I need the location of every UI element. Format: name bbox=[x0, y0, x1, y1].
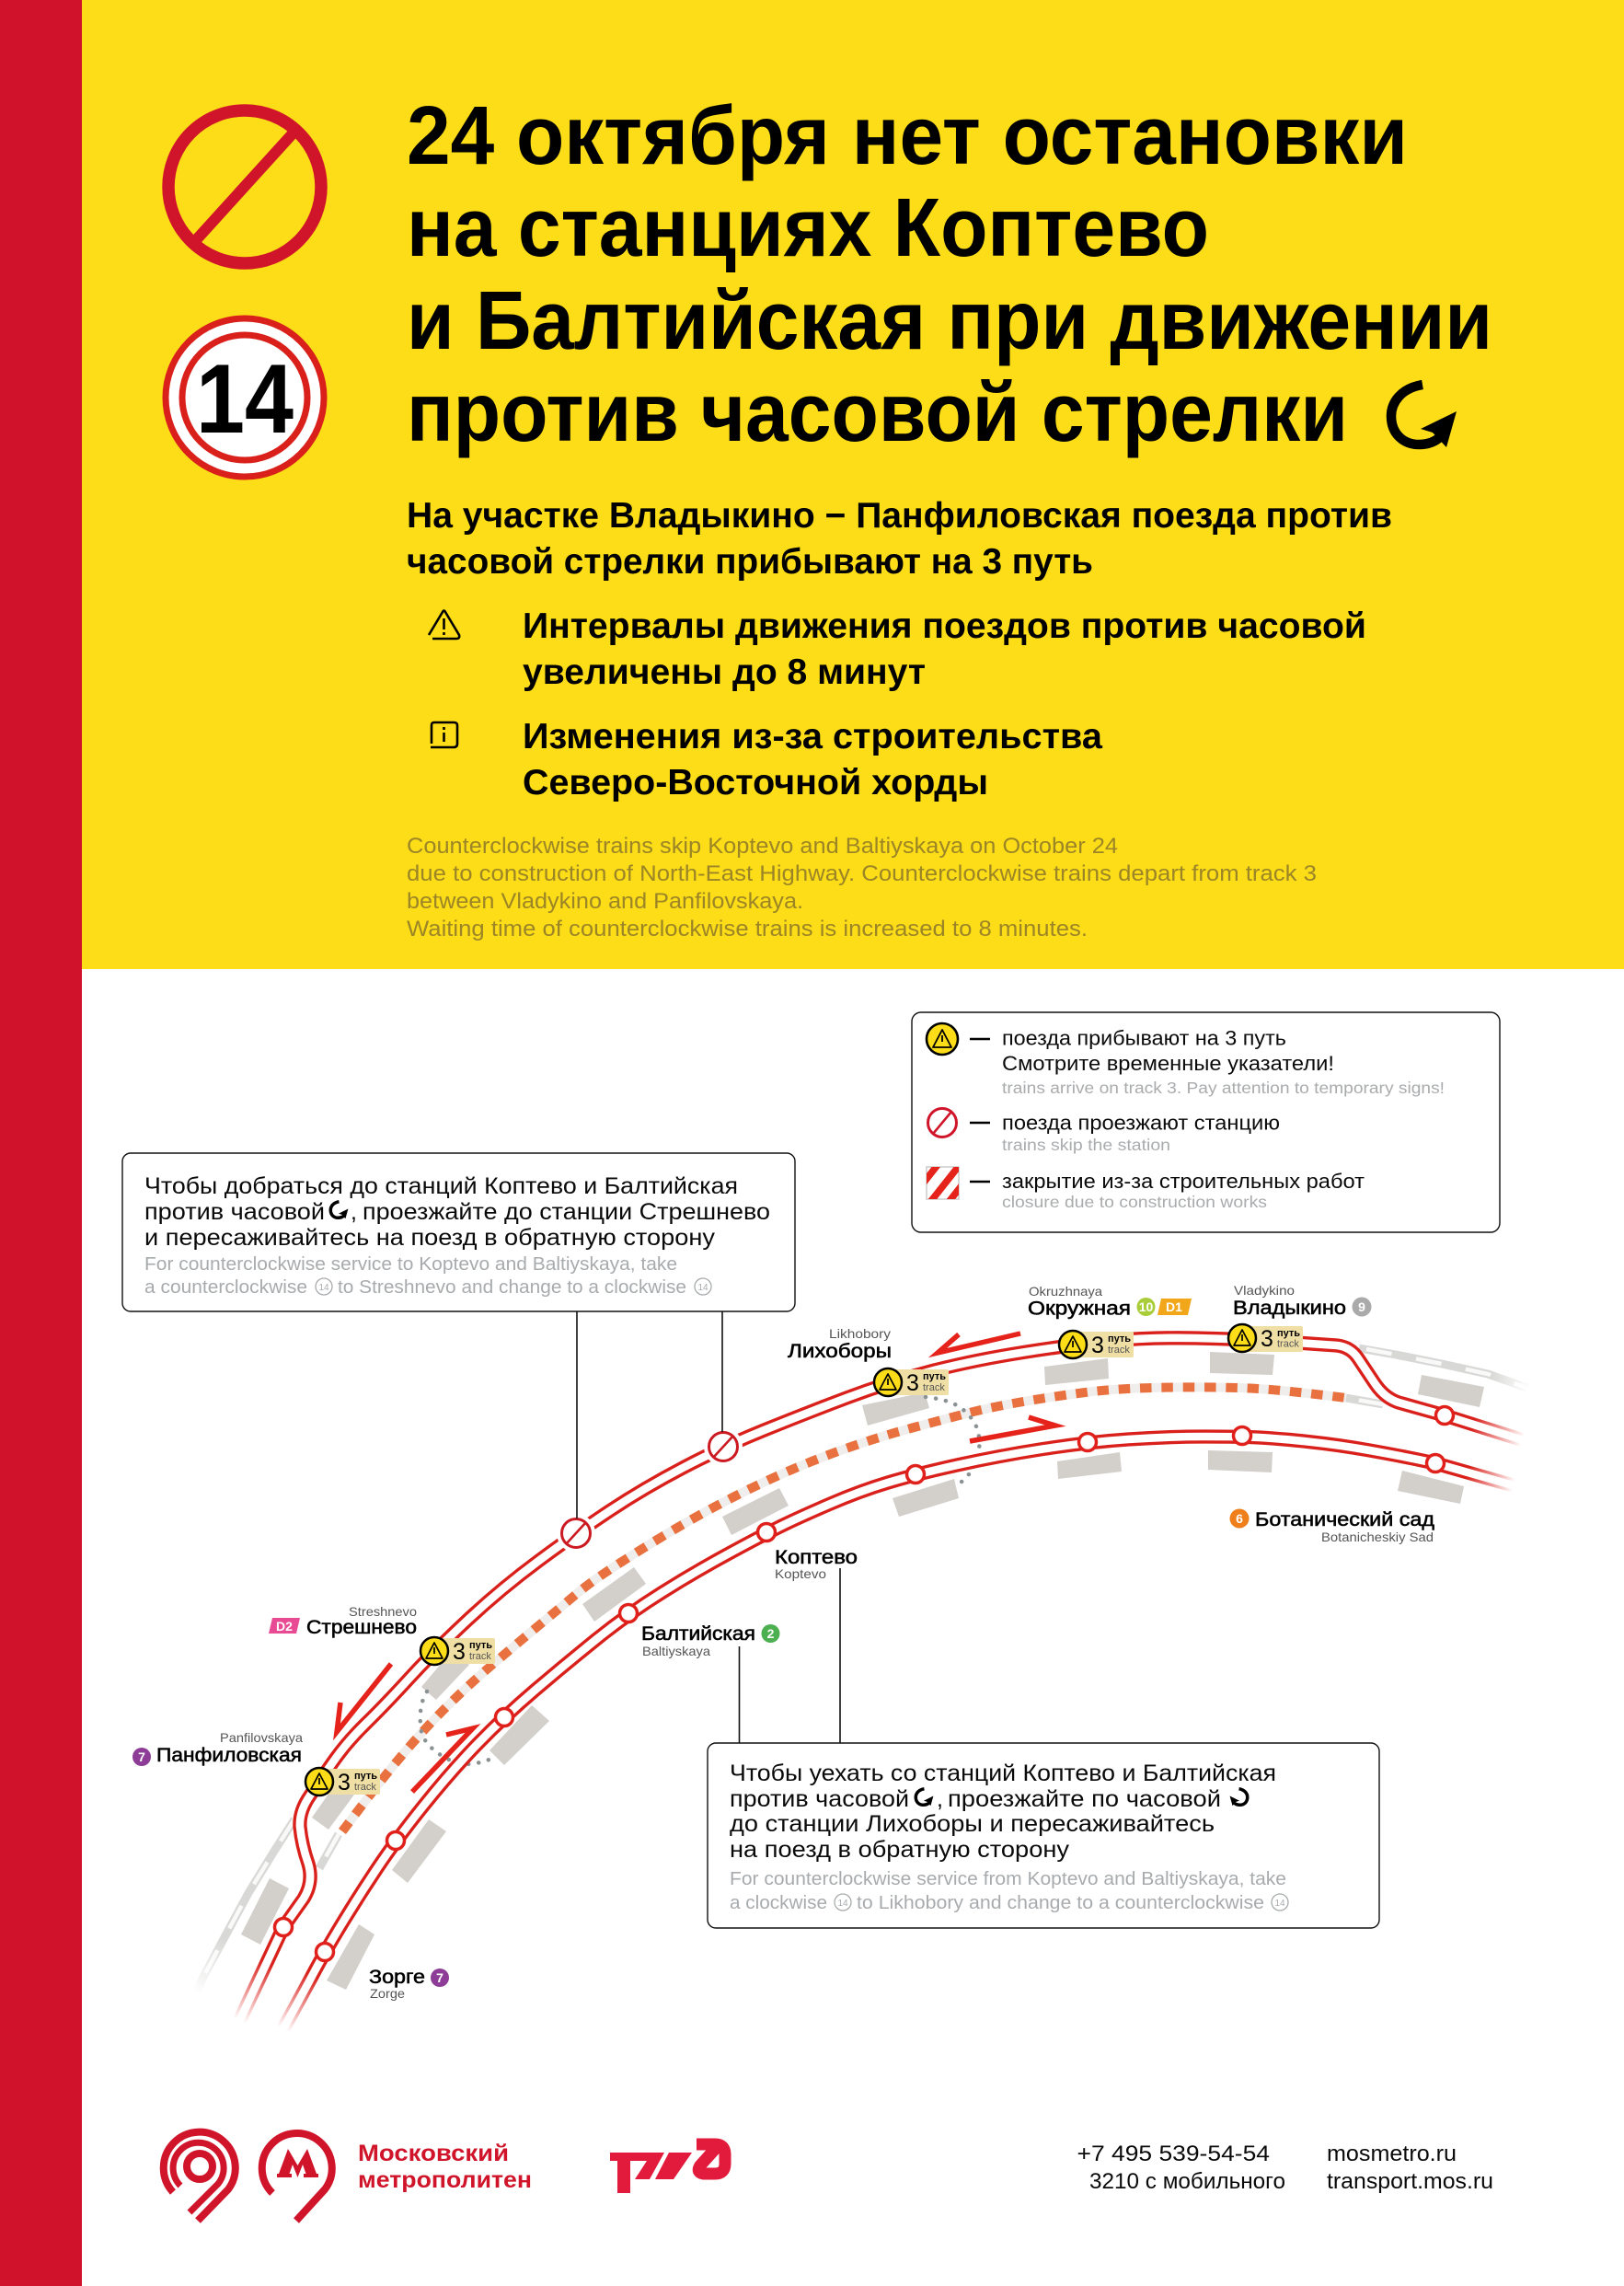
badge: Panfilovskaya track 3: track bbox=[354, 1782, 376, 1793]
icon: warning triangle bbox=[429, 611, 459, 639]
transfer dotted paths bbox=[420, 1397, 979, 1764]
badge: Streshnevo track 3: 3 bbox=[453, 1639, 466, 1665]
lower track pair bbox=[274, 1437, 1523, 2045]
english summary: Counterclockwise trains skip Koptevo and Baltiyskaya on October 24 bbox=[407, 834, 1118, 859]
station label: Zorge: Зорге bbox=[369, 1967, 425, 1988]
english summary bbox=[407, 834, 1317, 941]
badge: Vladykino track 3 bbox=[1228, 1324, 1303, 1352]
left red band bbox=[0, 0, 82, 2286]
callout: how to leave stations: против часовой bbox=[730, 1786, 909, 1812]
subheading: На участке Владыкино − Панфиловская поезда против bbox=[407, 496, 1392, 536]
title bbox=[407, 90, 1492, 459]
icon: line 14 small: 14 bbox=[318, 1283, 329, 1293]
callout: how to reach stations: , bbox=[351, 1199, 357, 1225]
icon: line 14 small bbox=[316, 1278, 332, 1295]
callout: how to reach stations: For counterclockwise service to Koptevo and Baltiyskaya, take bbox=[144, 1254, 677, 1275]
badge: Likhobory track 3: track bbox=[923, 1382, 945, 1393]
legend dash and text: track 3: trains arrive on track 3. Pay attention to temporary signs! bbox=[1002, 1079, 1445, 1097]
station label: Botanical garden: Ботанический сад bbox=[1255, 1509, 1434, 1530]
legend dash and text: closure bbox=[970, 1170, 1365, 1211]
badge: Likhobory track 3: 3 bbox=[906, 1370, 919, 1396]
badge: Panfilovskaya track 3 bbox=[305, 1768, 380, 1795]
station label: Vladykino: 9 bbox=[1358, 1299, 1365, 1314]
legend dash and text: track 3 bbox=[970, 1027, 1445, 1097]
station label: Okruzhnaya bbox=[1028, 1284, 1192, 1320]
bullet text: intervals: увеличены до 8 минут bbox=[523, 652, 926, 692]
station label: Likhobory: Лихоборы bbox=[788, 1341, 892, 1362]
station label: Baltiyskaya: 2 bbox=[767, 1626, 775, 1641]
callout: how to reach stations: to Streshnevo and change to a clockwise bbox=[338, 1277, 686, 1298]
callout: how to reach stations: Чтобы добраться до станций Коптево и Балтийская bbox=[144, 1173, 738, 1199]
station label: Botanical garden: Botanicheskiy Sad bbox=[1321, 1530, 1434, 1544]
skipped station: Baltic side bbox=[704, 1427, 743, 1466]
callout: how to leave stations: Чтобы уехать со станций Коптево и Балтийская bbox=[730, 1761, 1276, 1786]
legend dash and text: skip: поезда проезжают станцию bbox=[1002, 1112, 1280, 1134]
station label: Koptevo: Koptevo bbox=[775, 1566, 826, 1581]
icon: line 14 small bbox=[1272, 1894, 1288, 1911]
english summary: between Vladykino and Panfilovskaya. bbox=[407, 889, 803, 914]
station label: Panfilovskaya: 7 bbox=[138, 1749, 145, 1764]
leader lines: lower callout bbox=[740, 1568, 840, 1743]
upper track pair bbox=[230, 1338, 1532, 2041]
english summary: due to construction of North-East Highway. Counterclockwise trains depart from track 3 bbox=[407, 861, 1317, 886]
icon: line 14 small: 14 bbox=[837, 1899, 848, 1909]
station label: Okruzhnaya: Okruzhnaya bbox=[1029, 1284, 1102, 1299]
icon: line 14 small bbox=[695, 1278, 711, 1295]
skipped station: Koptevo side bbox=[557, 1514, 595, 1553]
station label: Zorge: Zorge bbox=[370, 1986, 405, 2001]
station label: Streshnevo bbox=[269, 1604, 417, 1638]
subheading bbox=[407, 496, 1392, 582]
station label: Streshnevo: Стрешнево bbox=[306, 1617, 417, 1638]
legend panel bbox=[912, 1012, 1500, 1232]
station label: Botanical garden: 6 bbox=[1236, 1511, 1243, 1526]
badge: Streshnevo track 3: путь bbox=[469, 1640, 492, 1651]
callout: how to reach stations: проезжайте до станции Стрешнево bbox=[363, 1199, 770, 1225]
legend dash and text: skip: trains skip the station bbox=[1002, 1136, 1170, 1154]
logo: RZD bbox=[610, 2144, 725, 2193]
badge: Streshnevo track 3 bbox=[420, 1637, 495, 1665]
badge: Streshnevo track 3: track bbox=[469, 1651, 491, 1662]
contact websites bbox=[1327, 2142, 1493, 2194]
yellow header panel bbox=[82, 0, 1624, 969]
callout: how to leave stations: до станции Лихоборы и пересаживайтесь bbox=[730, 1811, 1215, 1837]
callout: how to leave stations bbox=[708, 1743, 1379, 1928]
bullet text: intervals: Интервалы движения поездов против часовой bbox=[523, 606, 1366, 646]
legend dash and text: skip bbox=[970, 1112, 1280, 1154]
station label: Vladykino: Vladykino bbox=[1234, 1283, 1295, 1298]
badge: Vladykino track 3: путь bbox=[1277, 1328, 1300, 1339]
badge: Okruzhnaya track 3: 3 bbox=[1091, 1333, 1104, 1358]
station label: Botanical garden bbox=[1229, 1509, 1434, 1544]
station label: Panfilovskaya: Панфиловская bbox=[156, 1745, 302, 1766]
badge: Likhobory track 3: путь bbox=[923, 1371, 946, 1382]
english summary: Waiting time of counterclockwise trains is increased to 8 minutes. bbox=[407, 917, 1088, 941]
contact phones bbox=[1077, 2142, 1285, 2194]
station label: Okruzhnaya: Окружная bbox=[1028, 1298, 1131, 1320]
icon: small clockwise arrow bbox=[1230, 1789, 1248, 1806]
callout: how to reach stations: против часовой bbox=[144, 1199, 325, 1225]
station label: Koptevo: Коптево bbox=[775, 1547, 858, 1568]
direction arrows bbox=[337, 1334, 1055, 1792]
callout: how to leave stations: to Likhobory and change to a counterclockwise bbox=[857, 1893, 1264, 1913]
station label: Okruzhnaya: 10 bbox=[1139, 1299, 1153, 1314]
callout: how to reach stations: a counterclockwise bbox=[144, 1277, 307, 1298]
legend icon: closure stripes bbox=[926, 1166, 960, 1200]
callout: how to leave stations: , bbox=[937, 1786, 943, 1812]
station label: Streshnevo: Streshnevo bbox=[349, 1604, 417, 1619]
badge: Vladykino track 3: 3 bbox=[1261, 1326, 1273, 1352]
station label: Baltiyskaya: Baltiyskaya bbox=[642, 1644, 710, 1658]
callout: how to reach stations bbox=[122, 1153, 795, 1311]
callout: how to leave stations: a clockwise bbox=[730, 1893, 827, 1913]
subheading: часовой стрелки прибывают на 3 путь bbox=[407, 542, 1093, 582]
station label: Vladykino: Владыкино bbox=[1233, 1298, 1346, 1319]
icon: no stopping sign bbox=[168, 110, 321, 263]
badge: Okruzhnaya track 3: track bbox=[1108, 1345, 1130, 1356]
title: 24 октября нет остановки bbox=[407, 90, 1408, 182]
legend icon: skip station bbox=[927, 1108, 957, 1137]
badge: Panfilovskaya track 3: 3 bbox=[338, 1770, 351, 1795]
icon: line 14 small: 14 bbox=[697, 1283, 708, 1293]
station label: Panfilovskaya: Panfilovskaya bbox=[220, 1730, 303, 1745]
callout: how to reach stations: и пересаживайтесь на поезд в обратную сторону bbox=[144, 1225, 716, 1251]
map: track diagram bbox=[184, 1334, 1538, 2054]
callout: how to leave stations: проезжайте по часовой bbox=[948, 1786, 1221, 1812]
logo text: Moscow Metro bbox=[358, 2141, 532, 2193]
callout: how to leave stations: For counterclockwise service from Koptevo and Baltiyskaya, take bbox=[730, 1869, 1286, 1889]
bullet text: construction: Изменения из-за строительства bbox=[523, 717, 1102, 756]
station label: Panfilovskaya bbox=[132, 1730, 303, 1766]
badge: Vladykino track 3: track bbox=[1277, 1338, 1299, 1349]
leader lines: upper callout bbox=[577, 1311, 722, 1518]
logo text: Moscow Metro: Московский bbox=[358, 2141, 509, 2166]
title: и Балтийская при движении bbox=[407, 275, 1492, 367]
icon: line 14 small bbox=[835, 1894, 851, 1911]
callout: how to leave stations: на поезд в обратную сторону bbox=[730, 1837, 1070, 1863]
badge: Okruzhnaya track 3: путь bbox=[1108, 1334, 1131, 1345]
badge: Panfilovskaya track 3: путь bbox=[354, 1771, 377, 1782]
title: против часовой стрелки bbox=[407, 367, 1348, 459]
bullet text: construction: Северо-Восточной хорды bbox=[523, 763, 988, 802]
contact websites: transport.mos.ru bbox=[1327, 2169, 1493, 2194]
station label: Baltiyskaya bbox=[641, 1623, 780, 1658]
bullet text: construction bbox=[523, 717, 1102, 802]
logo text: Moscow Metro: метрополитен bbox=[358, 2167, 532, 2193]
title: на станциях Коптево bbox=[407, 182, 1209, 274]
logo: transport pin bbox=[164, 2132, 236, 2221]
icon: line 14 sign bbox=[166, 318, 324, 477]
open stations bbox=[274, 1406, 1454, 1960]
station label: Koptevo bbox=[775, 1547, 858, 1581]
bullet text: intervals bbox=[523, 606, 1366, 692]
station label: Likhobory: Likhobory bbox=[829, 1326, 891, 1341]
legend icon: track 3 warning bbox=[927, 1023, 958, 1055]
station label: Zorge bbox=[369, 1967, 449, 2001]
icon: counterclockwise arrow bbox=[1391, 385, 1457, 447]
station label: Likhobory bbox=[788, 1326, 892, 1362]
icon: information bbox=[431, 722, 457, 747]
track fade outs bbox=[184, 1375, 1538, 2054]
icon: line 14 small: 14 bbox=[1274, 1899, 1285, 1909]
legend dash and text: closure: закрытие из-за строительных работ bbox=[1002, 1170, 1365, 1193]
legend dash and text: track 3: поезда прибывают на 3 путь bbox=[1002, 1027, 1286, 1049]
logo: metro pin bbox=[262, 2133, 332, 2221]
icon: small counterclockwise arrow bbox=[330, 1202, 348, 1218]
contact phones: +7 495 539-54-54 bbox=[1077, 2142, 1270, 2166]
station label: Baltiyskaya: Балтийская bbox=[641, 1623, 755, 1645]
badge: Okruzhnaya track 3 bbox=[1059, 1331, 1134, 1358]
icon: line 14 sign: 14 bbox=[196, 343, 294, 454]
station label: Okruzhnaya: D1 bbox=[1166, 1299, 1182, 1314]
disused grey tracks bbox=[189, 1348, 1532, 2011]
station label: Zorge: 7 bbox=[436, 1970, 443, 1985]
station label: Vladykino bbox=[1233, 1283, 1371, 1319]
contact websites: mosmetro.ru bbox=[1327, 2142, 1457, 2166]
icon: small counterclockwise arrow bbox=[916, 1789, 933, 1806]
closed section bbox=[342, 1387, 1346, 1831]
contact phones: 3210 с мобильного bbox=[1089, 2169, 1285, 2194]
badge: Likhobory track 3 bbox=[874, 1368, 949, 1396]
station platforms bbox=[241, 1352, 1484, 1990]
legend dash and text: closure: closure due to construction works bbox=[1002, 1193, 1267, 1211]
legend dash and text: track 3: Смотрите временные указатели! bbox=[1002, 1052, 1334, 1075]
station label: Streshnevo: D2 bbox=[276, 1619, 293, 1634]
